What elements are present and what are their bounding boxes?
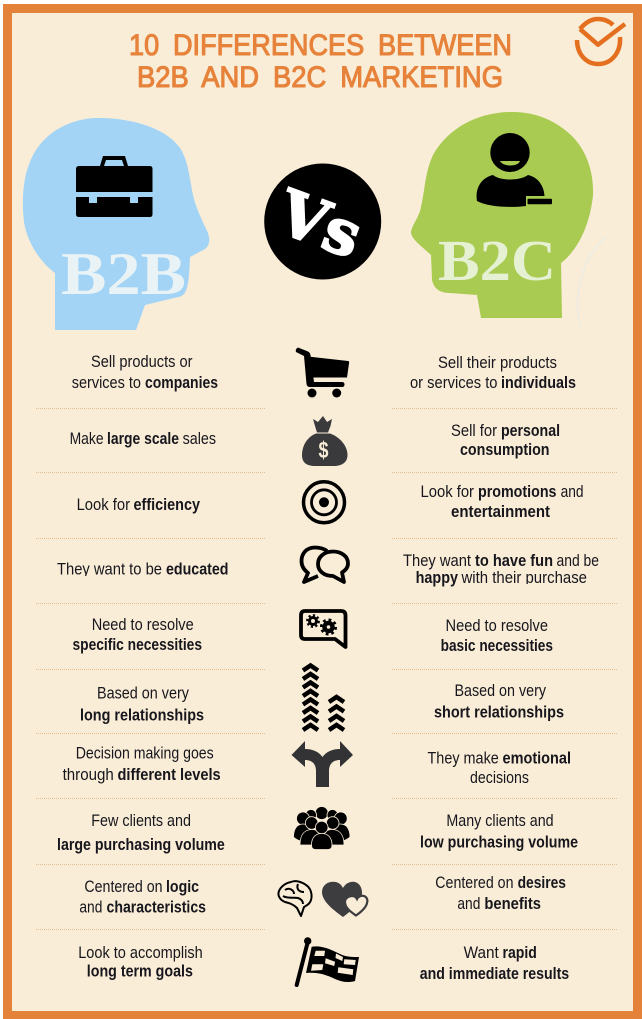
title: 10 DIFFERENCES BETWEEN <box>129 29 512 62</box>
row 9: focus: desires <box>518 873 566 892</box>
row 7: decisions: different levels <box>118 765 221 784</box>
row 3: goal: Look for <box>77 495 130 514</box>
row 7: decisions: emotional <box>502 749 571 768</box>
row 5: necessities: Need to resolve <box>92 615 194 634</box>
row 2: scale: consumption <box>460 440 550 459</box>
row 6: relationships: Based on very <box>97 684 189 703</box>
row 4: attitude <box>57 551 599 589</box>
row 3: goal <box>77 482 584 521</box>
title: B2B AND B2C MARKETING <box>137 61 503 94</box>
icon: person <box>477 133 552 207</box>
row 9: focus: and <box>457 894 480 913</box>
row 10: goals <box>78 943 569 983</box>
row 3: goal: efficiency <box>134 495 200 514</box>
title <box>129 29 512 94</box>
row 5: necessities <box>72 615 553 655</box>
row 2: scale: large scale <box>107 429 179 448</box>
row 4: attitude: and be <box>556 551 599 570</box>
icon: shopping cart <box>296 348 349 398</box>
row 8: volume <box>57 811 578 854</box>
icon: brain <box>278 881 312 916</box>
row 2: scale <box>70 421 560 459</box>
icon: gears speech bubble <box>301 611 346 647</box>
row 5: necessities: basic necessities <box>441 636 553 655</box>
row 10: goals: Want <box>464 943 499 962</box>
icon: crowd of people <box>294 806 350 850</box>
faint decorative strokes <box>578 236 607 327</box>
row 4: attitude: to have fun <box>475 551 553 570</box>
row 7: decisions: They make <box>428 749 499 768</box>
row 6: relationships: long relationships <box>80 706 204 725</box>
row 9: focus: Centered on <box>84 877 163 896</box>
row 3: goal: entertainment <box>451 502 550 521</box>
row 7: decisions: through <box>63 765 114 784</box>
icon: logo clock check <box>577 19 625 64</box>
illustration: B2C head <box>411 112 593 318</box>
icon: briefcase <box>76 156 152 217</box>
illustration: B2B head: B2B <box>61 241 186 307</box>
row 6: relationships: Based on very <box>454 681 546 700</box>
row 1: sell to: companies <box>145 373 218 392</box>
row 4: attitude: happy <box>416 568 458 587</box>
row 4: attitude: They want <box>403 551 471 570</box>
row 5: necessities: specific necessities <box>72 635 202 654</box>
row 5: necessities: Need to resolve <box>446 616 548 635</box>
row 1: sell to: Sell products or <box>91 352 193 371</box>
row 2: scale: personal <box>501 421 560 440</box>
row 8: volume: Many clients and <box>446 811 554 830</box>
row 9: focus <box>79 873 566 917</box>
row 6: relationships <box>80 681 564 725</box>
row 7: decisions: decisions <box>470 768 529 787</box>
row 2: scale: sales <box>183 429 216 448</box>
row 8: volume: large purchasing volume <box>57 835 225 854</box>
icon: split arrows <box>292 741 353 787</box>
row 9: focus: benefits <box>484 894 541 913</box>
illustration: B2C head: B2C <box>438 228 556 293</box>
row 9: focus: characteristics <box>106 898 206 917</box>
row 2: scale: Make <box>70 429 104 448</box>
badge: versus: Vs <box>268 175 371 272</box>
icon: speech bubbles <box>302 548 348 582</box>
icon: rising chevrons <box>303 666 344 730</box>
row 7: decisions <box>63 744 571 787</box>
icon: money bag <box>302 416 348 466</box>
row 6: relationships: short relationships <box>434 703 564 722</box>
row 1: sell to <box>72 352 576 392</box>
row 4: attitude: with their purchase <box>461 568 587 587</box>
icon: checkered flag <box>297 937 359 985</box>
illustration: B2B head <box>23 118 209 330</box>
row 10: goals: and immediate results <box>420 964 569 983</box>
row 3: goal: and <box>561 482 584 501</box>
row 10: goals: Look to accomplish <box>78 943 203 962</box>
row 8: volume: Few clients and <box>91 811 191 830</box>
row 1: sell to: individuals <box>501 373 576 392</box>
row 10: goals: rapid <box>502 943 537 962</box>
icon: money bag: $ <box>318 437 329 463</box>
row 1: sell to: Sell their products <box>438 353 557 372</box>
icon: target <box>304 482 344 523</box>
row 1: sell to: services to <box>72 373 141 392</box>
row dividers <box>36 408 617 930</box>
row 3: goal: Look for <box>420 482 474 501</box>
row 10: goals: long term goals <box>87 962 193 981</box>
row 3: goal: promotions <box>478 482 556 501</box>
row 7: decisions: Decision making goes <box>76 744 214 763</box>
row 4: attitude: educated <box>166 560 228 579</box>
row 9: focus: logic <box>166 877 199 896</box>
row 9: focus: and <box>79 898 102 917</box>
row 1: sell to: or services to <box>410 373 498 392</box>
row 9: focus: Centered on <box>435 873 514 892</box>
icon: hearts <box>322 882 367 917</box>
row 8: volume: low purchasing volume <box>420 833 578 852</box>
row 4: attitude: They want to be <box>57 560 162 579</box>
row 2: scale: Sell for <box>451 421 497 440</box>
